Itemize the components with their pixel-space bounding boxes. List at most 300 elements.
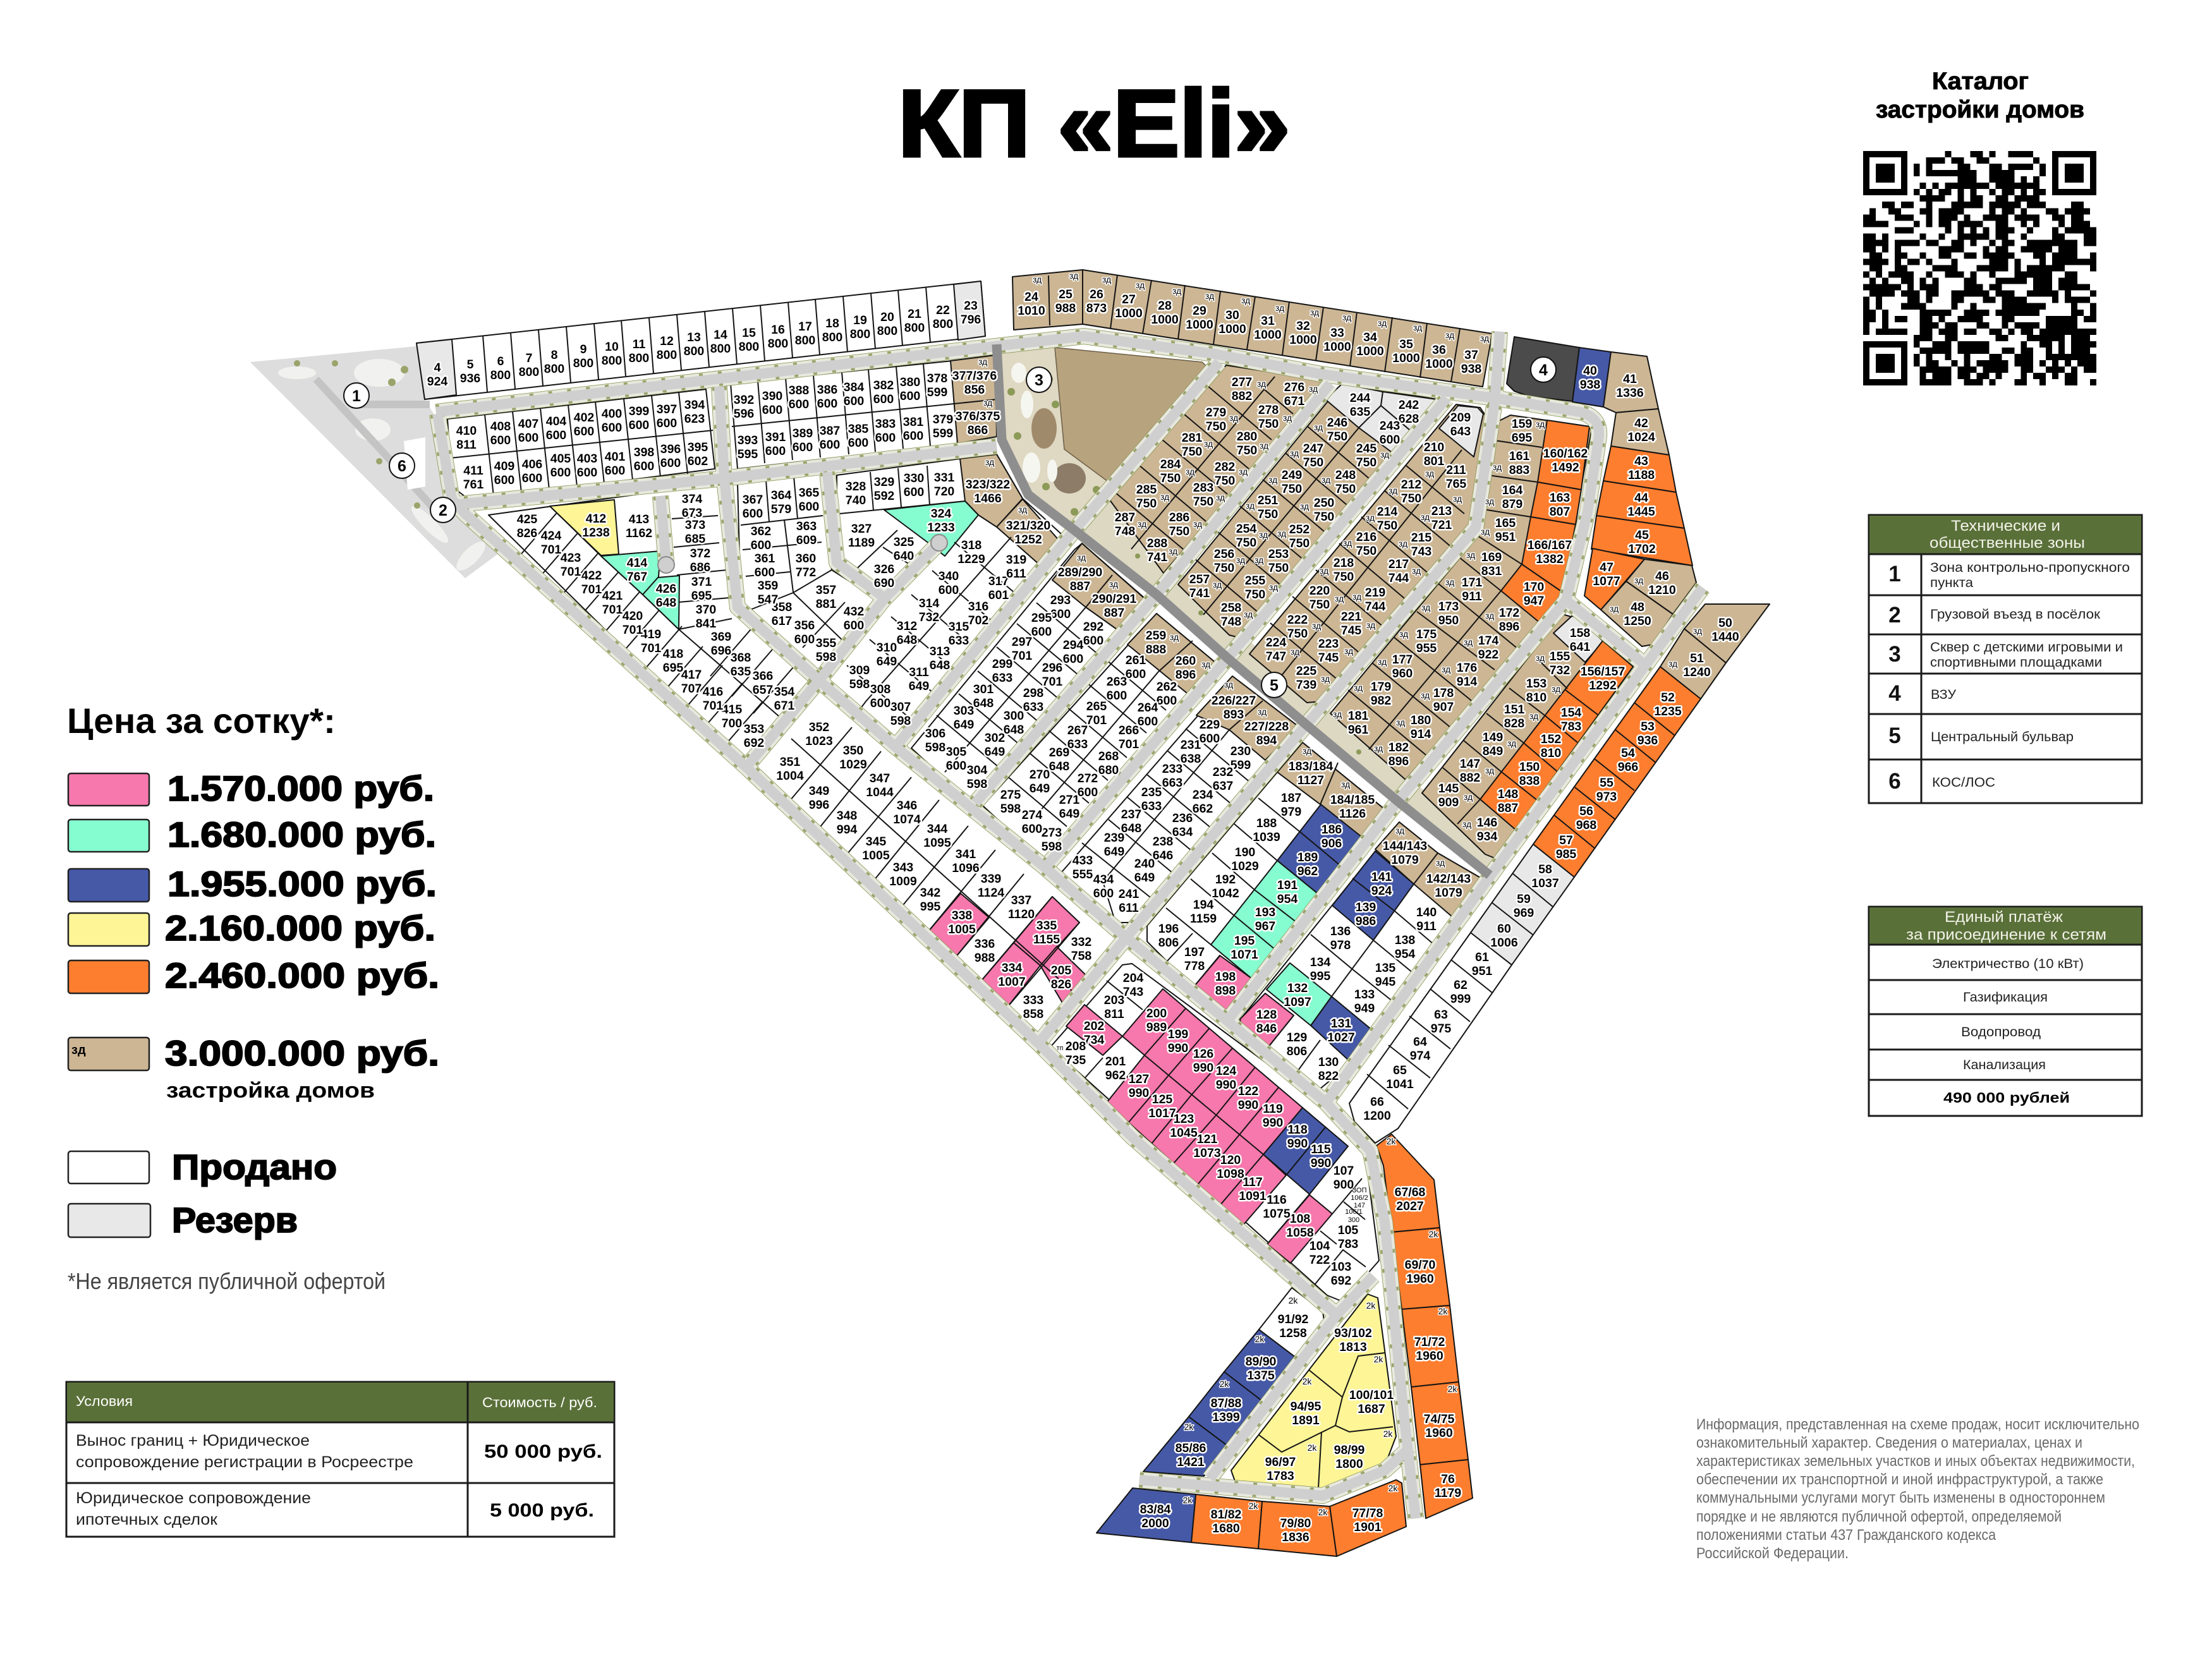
labels lots 226-241 and 433-434: 241 — [1119, 887, 1139, 901]
labels lots 353-374: 673 — [682, 506, 702, 520]
labels lots 103-135: 692 — [1331, 1274, 1351, 1288]
payment header — [1906, 909, 2106, 943]
labels lots 209-225: 221 — [1341, 610, 1361, 624]
labels lots 103-135: 131 — [1331, 1017, 1351, 1031]
labels lots 24-37: 25 — [1059, 288, 1073, 301]
labels lots 332-352: 350 — [843, 744, 863, 758]
labels lots 209-225: 721 — [1431, 518, 1452, 532]
technical zones numbers: 1 — [1888, 562, 1901, 586]
labels lots 50-66: 64 — [1413, 1035, 1427, 1049]
labels lots 332-352: 1009 — [889, 875, 917, 888]
labels lots 226-241 and 433-434: 634 — [1172, 825, 1193, 839]
labels lots 259-275: 701 — [1119, 737, 1139, 751]
labels lots 24-37: 938 — [1461, 362, 1481, 376]
labels lots 332-352: 994 — [837, 823, 857, 837]
labels lots 353-374: 353 — [744, 722, 764, 736]
labels lots 307-331: 600 — [870, 696, 890, 710]
labels lots 395-411: 600 — [546, 428, 566, 442]
labels lots 226-241 and 433-434: 233 — [1162, 762, 1182, 776]
labels lots 259-275: 896 — [1176, 668, 1196, 682]
labels lots 159-182: 181 — [1348, 709, 1368, 723]
house-building markers: зд — [1442, 664, 1450, 674]
house-building markers: зд — [1312, 621, 1321, 631]
house-building markers: зд — [1396, 717, 1405, 727]
small service lot labels 106: ЗОП — [1352, 1187, 1367, 1194]
labels lots 40-48 — [1580, 364, 1676, 628]
labels lots 395-411: 398 — [634, 445, 654, 459]
labels lots 50-66: 53 — [1641, 720, 1655, 734]
labels lots 307-331: 649 — [877, 655, 897, 669]
labels lots 353-374: 364 — [771, 488, 791, 502]
house-building markers: зд — [1335, 593, 1344, 603]
legend prices: 1.570.000 руб. — [167, 768, 434, 808]
labels lots 332-352: 1005 — [948, 923, 976, 936]
labels lots 40-48: 1024 — [1627, 430, 1655, 444]
labels lots 353-374: 696 — [711, 644, 731, 658]
labels lots 376-394: 600 — [873, 392, 894, 406]
technical zones numbers: 4 — [1888, 681, 1901, 706]
labels lots 50-66: 973 — [1596, 790, 1617, 804]
labels lots 159-182: 879 — [1502, 497, 1522, 511]
labels lots 209-225: 215 — [1411, 531, 1431, 545]
labels lots 332-352: 758 — [1071, 949, 1091, 963]
labels lots 289-306: 302 — [985, 731, 1005, 745]
labels lots 332-352: 345 — [866, 835, 886, 849]
labels lots 353-374: 600 — [799, 500, 819, 514]
legend prices: 3.000.000 руб. — [165, 1033, 439, 1073]
labels lots 103-135: 121 — [1197, 1132, 1217, 1146]
labels lots 209-225: 765 — [1446, 477, 1466, 491]
labels lots 307-331: 1229 — [957, 552, 985, 566]
labels lots 353-374: 358 — [772, 600, 792, 614]
labels lots 50-66: 951 — [1472, 964, 1492, 978]
labels lots 376-394: 394 — [684, 398, 705, 412]
labels lots 395-411: 602 — [688, 454, 708, 468]
small service lot labels 106: тп — [1057, 1044, 1064, 1052]
labels lots 259-275: 633 — [1067, 737, 1088, 751]
legend prices: 2.460.000 руб. — [165, 955, 439, 995]
labels lots 24-37: 1000 — [1356, 344, 1384, 358]
labels lots 395-411: 397 — [657, 403, 677, 416]
labels lots 307-331: 312 — [897, 619, 917, 633]
labels lots 136-158: 838 — [1519, 774, 1540, 788]
labels lots 332-352: 1044 — [866, 785, 894, 799]
house-building markers: зд — [1536, 419, 1545, 429]
block lots 244-258 — [1178, 384, 1439, 638]
labels lots 307-331: 702 — [968, 614, 988, 627]
labels lots 24-37: 26 — [1090, 288, 1103, 301]
labels lots 307-331: 1466 — [974, 492, 1002, 506]
labels south lots — [1140, 1185, 1461, 1544]
house-building markers: зд — [1421, 602, 1430, 612]
KPP entrance area — [250, 346, 499, 578]
labels lots 50-66: 51 — [1690, 651, 1704, 665]
park and boulevard strip — [1002, 338, 1504, 878]
labels lots 159-182: 914 — [1457, 675, 1477, 689]
labels lots 50-66: 1041 — [1386, 1077, 1414, 1091]
labels lots 50-66: 66 — [1370, 1095, 1384, 1109]
labels lots 307-331: 326 — [874, 562, 894, 576]
labels lots 307-331: 321/320 — [1006, 519, 1050, 533]
labels lots 289-306: 701 — [1012, 649, 1032, 663]
labels lots 103-135: 133 — [1354, 988, 1375, 1002]
labels lots 353-374: 685 — [685, 532, 705, 546]
labels lots 159-182: 169 — [1481, 550, 1502, 564]
labels lots 289-306: 600 — [1063, 652, 1083, 666]
labels lots 209-225: 739 — [1296, 678, 1316, 692]
labels lots 103-135: 130 — [1318, 1055, 1339, 1069]
block lots 327-307 — [825, 454, 1068, 746]
house-building markers: зд — [1668, 658, 1677, 669]
labels lots 103-135: 1073 — [1193, 1146, 1221, 1160]
labels lots 226-241 and 433-434: 238 — [1153, 835, 1173, 849]
legend status labels — [172, 1147, 337, 1240]
labels lots 259-275: 648 — [1049, 760, 1069, 773]
labels lots 242-258: 750 — [1327, 430, 1347, 444]
labels lots 136-158: 150 — [1519, 760, 1540, 774]
labels lots 332-352: 1095 — [923, 836, 951, 850]
labels south lots: 1960 — [1406, 1272, 1434, 1286]
labels lots 412-432: 424 — [541, 529, 561, 543]
labels south lots: 2000 — [1141, 1517, 1169, 1530]
labels lots 226-241 and 433-434: 229 — [1200, 718, 1220, 732]
2k markers: 2k — [1289, 1295, 1298, 1305]
block lots 367-432 — [738, 473, 880, 673]
labels lots 226-241 and 433-434: 637 — [1213, 779, 1233, 793]
labels lots 395-411: 761 — [463, 478, 483, 492]
labels lots 199-208: 743 — [1123, 985, 1143, 999]
labels lots 307-331: 633 — [949, 634, 969, 648]
labels lots 103-135: 1075 — [1263, 1207, 1291, 1221]
labels lots 259-275: 262 — [1157, 680, 1177, 694]
labels lots 226-241 and 433-434: 599 — [1231, 758, 1251, 772]
block lots 425-353 — [489, 483, 824, 771]
labels lots 353-374: 357 — [816, 583, 836, 597]
labels lots 209-225: 222 — [1287, 613, 1308, 627]
title: КП «Eli» — [898, 70, 1290, 176]
labels lots 259-275: 273 — [1042, 826, 1062, 840]
QR code — [1863, 154, 2096, 382]
labels lots 136-158: 911 — [1416, 919, 1437, 933]
labels lots 136-158: 849 — [1483, 744, 1503, 758]
labels lots 159-182: 178 — [1433, 686, 1454, 700]
labels lots 136-158: 155 — [1550, 650, 1570, 663]
labels lots 259-275: 275 — [1000, 788, 1021, 802]
south lots 67-102 — [1097, 1134, 1473, 1556]
labels lots 199-208: 735 — [1066, 1053, 1086, 1067]
labels lots 136-158: 887 — [1498, 801, 1518, 815]
labels lots 242-258: 250 — [1314, 496, 1334, 510]
labels lots 276-288: 748 — [1115, 524, 1135, 538]
labels lots 332-352: 988 — [975, 951, 995, 965]
labels lots 353-374: 617 — [772, 614, 792, 628]
labels lots 4-23: 800 — [544, 362, 564, 376]
labels lots 183-198: 1029 — [1231, 859, 1259, 873]
labels lots 226-241 and 433-434: 663 — [1162, 776, 1182, 790]
labels lots 276-288: 750 — [1182, 445, 1202, 459]
conditions rows text: ипотечных сделок — [76, 1511, 218, 1529]
labels lots 242-258: 750 — [1335, 482, 1356, 496]
labels lots 183-198: 187 — [1281, 791, 1301, 805]
labels lots 259-275: 263 — [1107, 675, 1127, 689]
labels lots 276-288: 882 — [1232, 389, 1252, 403]
labels lots 242-258 — [1189, 391, 1419, 629]
labels lots 136-158: 147 — [1460, 757, 1480, 771]
2k markers: 2k — [1255, 1334, 1265, 1344]
labels lots 183-198: 198 — [1215, 970, 1236, 984]
house-building markers: зд — [1201, 659, 1210, 669]
labels lots 259-275: 598 — [1042, 840, 1062, 854]
labels lots 40-48: 1210 — [1648, 583, 1676, 597]
labels lots 103-135: 990 — [1311, 1156, 1331, 1170]
block lots 259-275 — [983, 614, 1217, 864]
labels lots 353-374: 369 — [711, 630, 731, 644]
labels lots 50-66: 58 — [1538, 863, 1552, 876]
catalog heading: Каталог — [1932, 68, 2029, 95]
labels lots 307-331: 330 — [904, 471, 924, 485]
labels lots 412-432: 423 — [561, 551, 581, 565]
house-building markers: зд — [1310, 307, 1319, 317]
labels lots 332-352: 349 — [809, 784, 829, 798]
labels lots 209-225: 745 — [1341, 624, 1361, 638]
labels lots 209-225: 218 — [1334, 556, 1354, 570]
technical zones descriptions: Грузовой въезд в посёлок — [1930, 607, 2101, 622]
labels lots 242-258: 750 — [1268, 561, 1289, 575]
labels lots 307-331: 328 — [846, 480, 866, 493]
labels lots 259-275: 649 — [1030, 782, 1050, 796]
labels lots 412-432: 413 — [629, 512, 649, 526]
labels lots 289-306: 649 — [985, 745, 1005, 759]
labels lots 103-135: 126 — [1193, 1047, 1213, 1061]
labels lots 103-135: 846 — [1256, 1022, 1277, 1036]
labels lots 353-374: 361 — [755, 552, 775, 566]
house-building markers: зд — [1102, 274, 1111, 284]
labels lots 183-198: 962 — [1297, 864, 1318, 878]
house-building markers: зд — [1077, 552, 1086, 562]
labels lots 103-135: 123 — [1174, 1112, 1194, 1126]
labels lots 209-225: 750 — [1287, 627, 1308, 641]
labels lots 24-37: 1000 — [1425, 357, 1453, 371]
labels lots 24-37: 1000 — [1218, 322, 1246, 336]
labels lots 353-374: 671 — [774, 699, 794, 713]
labels lots 376-394: 386 — [817, 383, 837, 397]
conditions rows text: сопровождение регистрации в Росреестре — [76, 1453, 413, 1471]
labels lots 159-182: 159 — [1512, 417, 1532, 431]
labels lots 199-208: 199 — [1168, 1027, 1188, 1041]
labels lots 376-394: 600 — [789, 397, 809, 411]
labels lots 412-432: 701 — [623, 623, 643, 637]
technical zones numbers — [1888, 562, 1901, 794]
labels south lots: 93/102 — [1334, 1326, 1372, 1340]
labels lots 259-275: 260 — [1176, 654, 1196, 668]
labels lots 332-352: 332 — [1071, 935, 1091, 949]
house-building markers: зд — [1634, 575, 1643, 585]
labels south lots: 67/68 — [1395, 1185, 1425, 1199]
2k markers: 2k — [1249, 1501, 1258, 1511]
labels lots 24-37: 1000 — [1254, 328, 1282, 342]
labels lots 159-182: 1492 — [1552, 461, 1579, 475]
labels lots 159-182: 160/162 — [1543, 447, 1588, 461]
small service lot labels 106: 147 — [1354, 1202, 1365, 1209]
labels lots 103-135: 822 — [1318, 1069, 1339, 1083]
labels lots 395-411: 402 — [574, 411, 594, 425]
labels lots 276-288 — [1115, 375, 1304, 564]
labels lots 242-258: 600 — [1380, 433, 1400, 447]
labels lots 242-258: 253 — [1268, 547, 1289, 561]
labels lots 209-225: 211 — [1446, 463, 1466, 477]
labels lots 183-198: 1042 — [1212, 887, 1239, 900]
labels lots 353-374: 355 — [816, 636, 836, 650]
labels lots 50-66: 61 — [1475, 950, 1489, 964]
labels lots 4-23: 19 — [853, 313, 867, 327]
labels lots 40-48: 1445 — [1627, 505, 1655, 519]
labels lots 209-225: 224 — [1266, 636, 1286, 650]
labels lots 226-241 and 433-434: 235 — [1141, 785, 1162, 799]
labels lots 103-135: 783 — [1338, 1237, 1358, 1251]
labels lots 226-241 and 433-434: 434 — [1093, 873, 1114, 887]
labels lots 289-306: 306 — [925, 727, 945, 741]
conditions header text — [76, 1393, 597, 1410]
technical zones numbers: 2 — [1888, 603, 1901, 627]
house-building markers: зд — [1485, 610, 1494, 621]
labels lots 376-394: 392 — [734, 393, 754, 407]
labels lots 353-374: 600 — [743, 507, 763, 521]
technical zones header: Технические и — [1951, 518, 2060, 535]
labels lots 276-288: 750 — [1169, 524, 1189, 538]
labels lots 412-432: 416 — [703, 685, 723, 699]
house-building markers: зд — [1366, 512, 1375, 523]
labels lots 242-258: 750 — [1282, 482, 1302, 496]
labels lots 242-258: 256 — [1214, 547, 1234, 561]
labels lots 136-158: 149 — [1483, 730, 1503, 744]
labels lots 353-374: 635 — [731, 665, 751, 679]
conditions rows text: Вынос границ + Юридическое — [76, 1432, 310, 1450]
labels lots 136-158: 641 — [1570, 640, 1590, 654]
labels south lots: 1375 — [1247, 1369, 1275, 1383]
labels lots 136-158: 136 — [1330, 924, 1351, 938]
2k markers: 2k — [1383, 1429, 1393, 1439]
labels lots 136-158: 144/143 — [1383, 839, 1427, 853]
labels lots 395-411: 600 — [602, 421, 622, 435]
legend prices — [165, 768, 439, 1073]
labels lots 395-411: 406 — [522, 457, 542, 471]
labels lots 183-198: 1127 — [1297, 773, 1324, 787]
labels lots 307-331: 327 — [851, 522, 872, 536]
labels lots 376-394: 381 — [903, 415, 923, 429]
labels lots 307-331: 600 — [904, 485, 924, 499]
labels lots 103-135: 990 — [1193, 1061, 1213, 1075]
block lots 183-198 — [1147, 742, 1384, 1014]
labels lots 159-182: 176 — [1457, 661, 1477, 675]
house-building markers: зд — [1257, 378, 1266, 389]
disclaimer: положениями статьи 437 Гражданского кодекса — [1696, 1527, 1996, 1544]
labels lots 4-23: 800 — [629, 351, 649, 365]
labels lots 353-374: 372 — [690, 547, 710, 560]
labels lots 376-394: 390 — [762, 389, 782, 403]
house-building markers: зд — [1399, 538, 1407, 548]
labels lots 332-352: 858 — [1023, 1007, 1043, 1021]
house-building markers: зд — [1186, 466, 1194, 476]
labels lots 353-374: 368 — [731, 651, 751, 665]
disclaimer: порядке и не являются публичной офертой, определяемой — [1696, 1508, 2062, 1525]
labels lots 24-37: 1000 — [1115, 306, 1143, 320]
house-building markers: зд — [1204, 439, 1213, 449]
labels lots 289-306: 290/291 — [1092, 592, 1136, 606]
labels lots 242-258: 245 — [1356, 442, 1376, 456]
labels lots 412-432: 417 — [681, 668, 702, 682]
labels lots 332-352: 333 — [1023, 993, 1043, 1007]
labels lots 276-288: 750 — [1193, 495, 1213, 509]
labels lots 136-158: 909 — [1438, 796, 1459, 809]
labels lots 226-241 and 433-434: 433 — [1073, 854, 1093, 868]
labels lots 136-158: 152 — [1541, 732, 1561, 746]
labels lots 209-225: 210 — [1424, 440, 1444, 454]
labels lots 376-394: 599 — [933, 427, 953, 440]
labels lots 226-241 and 433-434: 649 — [1104, 845, 1124, 859]
labels lots 395-411: 600 — [550, 466, 571, 480]
labels lots 242-258: 249 — [1282, 468, 1302, 482]
block lots 144-128 — [1240, 822, 1481, 1088]
labels lots 40-48: 1188 — [1628, 468, 1655, 482]
labels lots 412-432: 700 — [722, 717, 742, 730]
house-building markers: зд — [1193, 519, 1202, 529]
labels lots 183-198: 194 — [1193, 898, 1213, 912]
labels lots 376-394: 600 — [875, 431, 896, 445]
labels lots 136-158: 145 — [1438, 782, 1459, 796]
legend sublabel: застройка домов — [166, 1079, 375, 1103]
labels lots 136-158: 148 — [1498, 787, 1518, 801]
labels lots 332-352: 1005 — [862, 849, 890, 863]
house-building markers: зд — [1309, 384, 1318, 394]
labels lots 136-158: 810 — [1526, 691, 1547, 705]
labels lots 40-48: 47 — [1600, 560, 1613, 574]
catalog heading — [1876, 68, 2084, 123]
labels lots 353-374 — [682, 486, 836, 750]
labels lots 242-258: 244 — [1350, 391, 1370, 405]
house-building markers: зд — [1399, 629, 1408, 639]
labels lots 307-331 — [846, 471, 1050, 728]
labels lots 50-66: 969 — [1514, 906, 1534, 920]
labels lots 50-66: 1240 — [1683, 665, 1711, 679]
labels lots 50-66: 1235 — [1654, 705, 1682, 718]
labels lots 4-23: 800 — [795, 334, 815, 348]
labels lots 353-374: 686 — [690, 560, 710, 574]
labels lots 183-198: 192 — [1215, 873, 1236, 887]
labels lots 395-411: 403 — [577, 452, 597, 466]
labels lots 209-225: 219 — [1365, 586, 1385, 600]
labels lots 332-352: 348 — [837, 809, 857, 823]
labels lots 353-374: 362 — [751, 524, 771, 538]
labels lots 50-66: 56 — [1579, 804, 1593, 818]
labels lots 226-241 and 433-434: 232 — [1213, 765, 1233, 779]
labels lots 276-288: 750 — [1160, 471, 1181, 485]
labels lots 159-182: 947 — [1524, 594, 1544, 608]
labels lots 4-23: 800 — [657, 348, 677, 362]
labels lots 159-182: 174 — [1478, 634, 1498, 648]
labels lots 136-158: 138 — [1395, 933, 1415, 947]
labels lots 209-225: 216 — [1356, 530, 1376, 544]
labels lots 395-411: 405 — [550, 452, 571, 466]
block lots 204-103 — [1050, 964, 1379, 1302]
labels lots 103-135: 124 — [1216, 1064, 1236, 1078]
labels lots 259-275: 269 — [1049, 746, 1069, 760]
house-building markers: зд — [1216, 492, 1225, 502]
payment header: Единый платёж — [1945, 909, 2063, 926]
house-building markers: зд — [1170, 632, 1179, 642]
labels lots 226-241 and 433-434: 638 — [1181, 752, 1201, 766]
labels lots 276-288: 281 — [1182, 431, 1202, 445]
labels lots 159-182: 172 — [1499, 606, 1519, 620]
